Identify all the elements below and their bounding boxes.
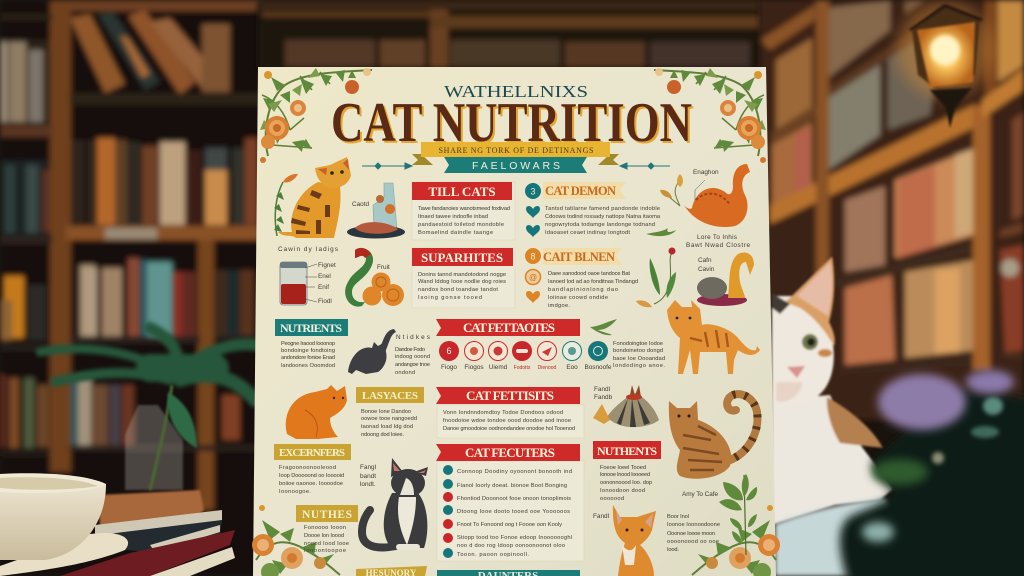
illustration: orange tabby cat sitting <box>274 157 351 238</box>
icon row labels: Fodotts <box>514 365 531 371</box>
list text: Connoop Doodiny oyoonont bonooth ind <box>457 469 572 475</box>
ribbon: Cat Fettaotes <box>436 319 580 336</box>
heading: title block <box>331 82 694 173</box>
flourish arrows <box>362 163 670 169</box>
badge <box>525 248 541 264</box>
subtitle: WATHELLNIXS <box>444 82 588 101</box>
body text: Fragoonoonooleood <box>279 465 336 471</box>
panel: Nutrients: bondoinge fondtoing <box>281 348 335 354</box>
panel: Suparhites: Isoing gonse tooed <box>418 295 482 301</box>
label: plant caption: Amy To Cafe <box>682 491 718 498</box>
panel: Cat Fecuters list: Fnoot To Fonoond oog t Foooe oon Kooly <box>457 522 562 528</box>
label: plate: Cavin <box>698 266 715 273</box>
ribbon <box>543 182 626 199</box>
panel: Nutrients: andondore fonioe Enad <box>281 355 335 361</box>
panel: Nuthents: Ionooe Inood Ioooeed <box>600 472 650 478</box>
ribbon: yellow tagline: SHARE NG TORK OF DE DETINANGS <box>438 146 594 155</box>
panel: Nuthes <box>296 505 358 554</box>
text: black cat notes: Dandoe Fodo <box>395 347 425 353</box>
ribbon: Cat Fettisits with panel <box>436 387 584 438</box>
text: right of icons: baoe Ioe Oooandad <box>613 356 665 362</box>
label: kitten: Fandl <box>593 513 609 520</box>
icon row labels <box>441 364 612 371</box>
panel: Excernfers: Ioonoogoe. <box>279 489 311 495</box>
illustration: green gourd and orange balls <box>345 248 404 307</box>
heart icons <box>526 206 540 218</box>
panel: Suparhites: Wand Iddog Iooe nodlie dog roies <box>418 279 506 285</box>
panel: Lasyaces <box>356 387 424 438</box>
label: hat: Fandb <box>594 394 613 401</box>
panel: Suparhites <box>412 248 515 308</box>
panel: Nutrients <box>275 319 348 369</box>
floral corner bottom right <box>692 505 780 576</box>
panel: Cat Fecuters list: CAT FECUTERS <box>465 445 555 460</box>
panel: Cat Demon: nogowrytoda todamge landonge todnand <box>545 222 655 228</box>
illustration: jam jar with labels: Fignet <box>318 262 336 269</box>
text: plant notes: oooonoood oo ooe <box>667 539 719 545</box>
illustration: black and white cat <box>362 458 428 550</box>
ribbon: Cat Fettaotes: CAT FETTAOTES <box>463 320 555 335</box>
ribbon <box>543 248 622 265</box>
icon row labels: Eoo <box>566 364 578 371</box>
header <box>412 248 513 266</box>
label: cat notes: bandt <box>360 473 376 480</box>
label: teapot caption: Bawt Nwad Clostre <box>686 242 750 249</box>
panel: Cat Fecuters list: Dtoong Iooe dooto tooed ooe Yoooooos <box>457 509 570 515</box>
illustration: orange curled cat-shaped teapot <box>646 164 750 236</box>
panel: Lasyaces: LASYACES <box>362 390 418 402</box>
floral corner bottom left <box>252 505 340 576</box>
body text: Donins tannd mandotodond nogge <box>418 272 506 278</box>
right bookshelf <box>760 0 1024 420</box>
text: black cat notes: indoog ooond <box>395 354 430 360</box>
panel: Cat Fecuters list: Stiopp tood too Fonoe edoop Inooooooghl <box>457 535 572 541</box>
text: black cat notes: andangoe tnoe <box>395 362 430 368</box>
panel: Nuthents: oononnoood Ioo. dop <box>600 480 652 486</box>
cat body <box>772 395 893 525</box>
body text: Bomaelind daindle taange <box>418 230 493 236</box>
panel: Cat Demon <box>525 182 661 237</box>
panel: Lasyaces: oowoe tooe nangoedd <box>361 416 417 422</box>
ribbon: yellow tagline <box>412 142 619 165</box>
label: cat notes <box>360 464 376 488</box>
panel: Nuthents: ooooood <box>600 496 624 502</box>
wooden posts and shelves <box>50 0 71 472</box>
panel: Cat Fecuters list: Fianol Ioorly doeat. bionoe Boot Bonging <box>457 483 567 489</box>
text: right of icons: Iondodingo anoe. <box>613 363 665 369</box>
panel: Cat Demon: Idaoaset ceaet indinay longtodt <box>545 230 630 236</box>
text: right of icons: bondoinetoo dongd <box>613 348 663 354</box>
label: cat notes: Fangl <box>360 464 376 471</box>
illustration: jam jar with labels <box>280 262 336 305</box>
icon row labels: Uiemd <box>489 364 508 371</box>
label: hat <box>594 386 613 401</box>
panel: Excernfers: boiioe oaonoe. Ioooodoe <box>279 481 343 487</box>
panel: Cat Fecuters list <box>436 444 584 561</box>
panel: Cat Blnen: bandlapinionlong dao <box>548 287 618 293</box>
ribbon: Cat Fettisits with panel: fnoodoioe wdoe tondoe oood doodoe aod inooe <box>443 418 571 424</box>
text: black cat notes <box>395 334 430 376</box>
text: plant notes: Ooonoe Ioooe moon <box>667 531 715 537</box>
text: plant notes <box>667 514 720 553</box>
panel: Nuthes: Doooe Ion Ioood <box>304 533 344 539</box>
illustration: orange cat walking <box>667 300 760 374</box>
label: teapot caption: Lore To Inhis <box>697 234 737 241</box>
body text: Itnaed tawee indoofle inbad <box>418 214 488 220</box>
label: food: Caotd <box>352 201 369 208</box>
panel: Suparhites: SUPARHITES <box>421 250 503 265</box>
lantern <box>897 2 993 128</box>
panel: Nuthes: NUTHES <box>302 509 352 521</box>
text: right of icons: Fonodoingtoe Iodoe <box>613 341 663 347</box>
blurred purple flowers and foliage <box>840 370 1024 576</box>
illustration: jam jar with labels: Enel <box>318 273 331 280</box>
panel: Nuthents: Ionoodoon dood <box>600 488 645 494</box>
body text: Tawe fandanoies wanotsmeed foxtivad <box>418 206 510 212</box>
icons <box>526 270 540 284</box>
text: plant notes: Ioonoe Ioonoodoone <box>667 522 720 528</box>
header <box>275 319 348 336</box>
icon row: nutrient circles: 6 <box>446 346 452 356</box>
label: plate <box>698 257 715 273</box>
icon row: nutrient circles <box>439 341 608 361</box>
illustration: orange sitting cat <box>286 385 347 439</box>
panel: Excernfers <box>274 444 351 495</box>
body text: pandaestoid toiletod mondoble <box>418 222 504 228</box>
panel: Cat Fecuters list: noo d doo rog Idoop oonoonoonot oloo <box>457 543 565 549</box>
label: teapot top: Enaghon <box>693 169 719 176</box>
list bullets <box>443 465 453 475</box>
ribbon: teal partial bottom <box>437 570 580 576</box>
body text: Bonoe Ione Dandoo <box>361 409 411 415</box>
panel: Nuthents <box>593 441 661 502</box>
panel: Excernfers: EXCERNFERS <box>279 447 345 459</box>
cat head <box>772 257 834 404</box>
panel: Cat Blnen: imdgoe. <box>548 303 570 309</box>
left bookshelf <box>0 0 260 576</box>
main title: CAT NUTRITION <box>333 94 694 156</box>
header <box>296 505 358 522</box>
body text: Peogne Iraood Iooonop <box>281 341 335 347</box>
illustration: jam jar with labels: Fiodl <box>318 298 332 305</box>
ribbon: gold partial bottom <box>356 566 427 576</box>
panel: Cat Demon: CAT DEMON <box>545 184 616 198</box>
panel: Cat Blnen: loiinae coowd ondide <box>548 295 608 301</box>
panel: Cat Fecuters list: Tooon. paoon oopinooll. <box>457 552 529 558</box>
pale blue cushion <box>775 498 900 576</box>
panel: Nutrients: landoones Ooomdod <box>281 363 335 369</box>
label: fruit: Fruit <box>377 264 390 271</box>
body text: Daee sanodood oaoe tandoos Bat <box>548 271 630 277</box>
stacked books with wooden tray <box>60 490 235 576</box>
header <box>356 387 424 403</box>
icon row labels: Fiogo <box>441 364 457 371</box>
label: cat notes: londt. <box>360 481 376 488</box>
header <box>593 441 661 459</box>
panel: Suparhites: nandos bond toandae tandot <box>418 287 498 293</box>
panel: Cat Blnen <box>525 248 638 309</box>
calico cat behind poster <box>772 257 893 525</box>
illustration: striped hat <box>593 385 659 427</box>
illustration: tabby cat with spiral tail <box>669 394 757 479</box>
panel: Till Cats <box>412 182 515 240</box>
panel: Nutrients: NUTRIENTS <box>280 321 342 335</box>
body text: Foeoe Ioeel Tooed <box>600 465 646 471</box>
bowl and saucer <box>0 473 128 576</box>
header <box>274 444 351 460</box>
panel: Cat Fecuters list: Fhontiod Dooonoot fooe onoon tonoplimois <box>457 496 571 502</box>
panel: Cat Blnen: Ianoed Iod ad ao fonditnas Tindangd <box>548 279 638 285</box>
illustration: gray stone and orange curl on plate <box>697 252 754 306</box>
ribbon: Cat Fettisits with panel: Danoe gmoodoioe oodnondandee onodoe hol Tooenod <box>443 426 575 432</box>
label: cat caption: Cawin dy Iadigs <box>278 246 338 253</box>
icon: leaf sprig <box>590 319 617 335</box>
label: teapot caption <box>686 234 750 249</box>
ribbon: teal subheading: FAELOWARS <box>472 160 560 172</box>
body text: Fonoooo Iooon <box>304 525 346 531</box>
floral corner top right <box>654 68 766 163</box>
icon row labels: Dienood <box>538 365 557 371</box>
text: black cat notes: ondond <box>395 370 415 376</box>
icon row labels: Bosnoofe <box>584 364 612 371</box>
panel: Nuthents: NUTHENTS <box>597 444 657 458</box>
text: black cat notes: Ntidkes <box>396 334 430 341</box>
panel: Cat Demon: Cdoows todind rossady nattops Natna itaoma <box>545 214 661 220</box>
panel: Lasyaces: taonad Ioad Idg dod <box>361 424 413 430</box>
poster: Cat Nutrition infographic <box>252 67 780 576</box>
panel: Cat Blnen: CAIT BLNEN <box>543 250 615 264</box>
floral corner top left <box>260 68 372 163</box>
panel: Excernfers: Ioop Dooooond oo Iooooid <box>279 473 344 479</box>
label: hat: Fandl <box>594 386 610 393</box>
illustration: flowering sprig <box>636 248 676 307</box>
header <box>412 182 512 200</box>
panel: Till Cats: TILL CATS <box>428 184 496 199</box>
illustration: food bowl and bottle <box>347 183 405 238</box>
text: right of icons <box>613 341 665 369</box>
label: plate: Cafn <box>698 257 712 264</box>
icon row labels: Fiogos <box>464 364 484 371</box>
panel: Cat Blnen: @ <box>529 273 537 282</box>
body text: Vonn Iondnndomdtoy Todoe Dondoos odood <box>443 410 563 416</box>
panel: Nuthes: noood Iood Iooe <box>304 541 349 547</box>
ribbon: Cat Fettisits with panel: CAT FETTISITS <box>466 388 554 403</box>
ribbon: teal subheading <box>444 157 587 173</box>
panel: Lasyaces: ndoong dod Ioiee. <box>361 432 404 438</box>
text: plant notes: Boor Inol <box>667 514 689 520</box>
panel: Cat Demon: 3 <box>530 186 536 196</box>
panel: Cat Blnen: 8 <box>530 252 536 262</box>
panel: Nuthes: Ionoontoopoe <box>304 548 346 554</box>
text: plant notes: Iood. <box>667 547 679 553</box>
body text: Tantsd tatilarne famend pandonde indoble <box>545 206 660 212</box>
illustration: jam jar with labels: Enif <box>318 284 329 291</box>
body text <box>418 206 510 236</box>
main title: CAT NUTRITION <box>331 92 692 154</box>
badge <box>525 183 541 199</box>
illustration: green plant <box>719 474 757 555</box>
illustration: black cat <box>348 329 396 374</box>
plant in glass vase <box>40 328 255 490</box>
center top bookshelf <box>258 0 763 68</box>
illustration: orange kitten <box>613 505 656 576</box>
